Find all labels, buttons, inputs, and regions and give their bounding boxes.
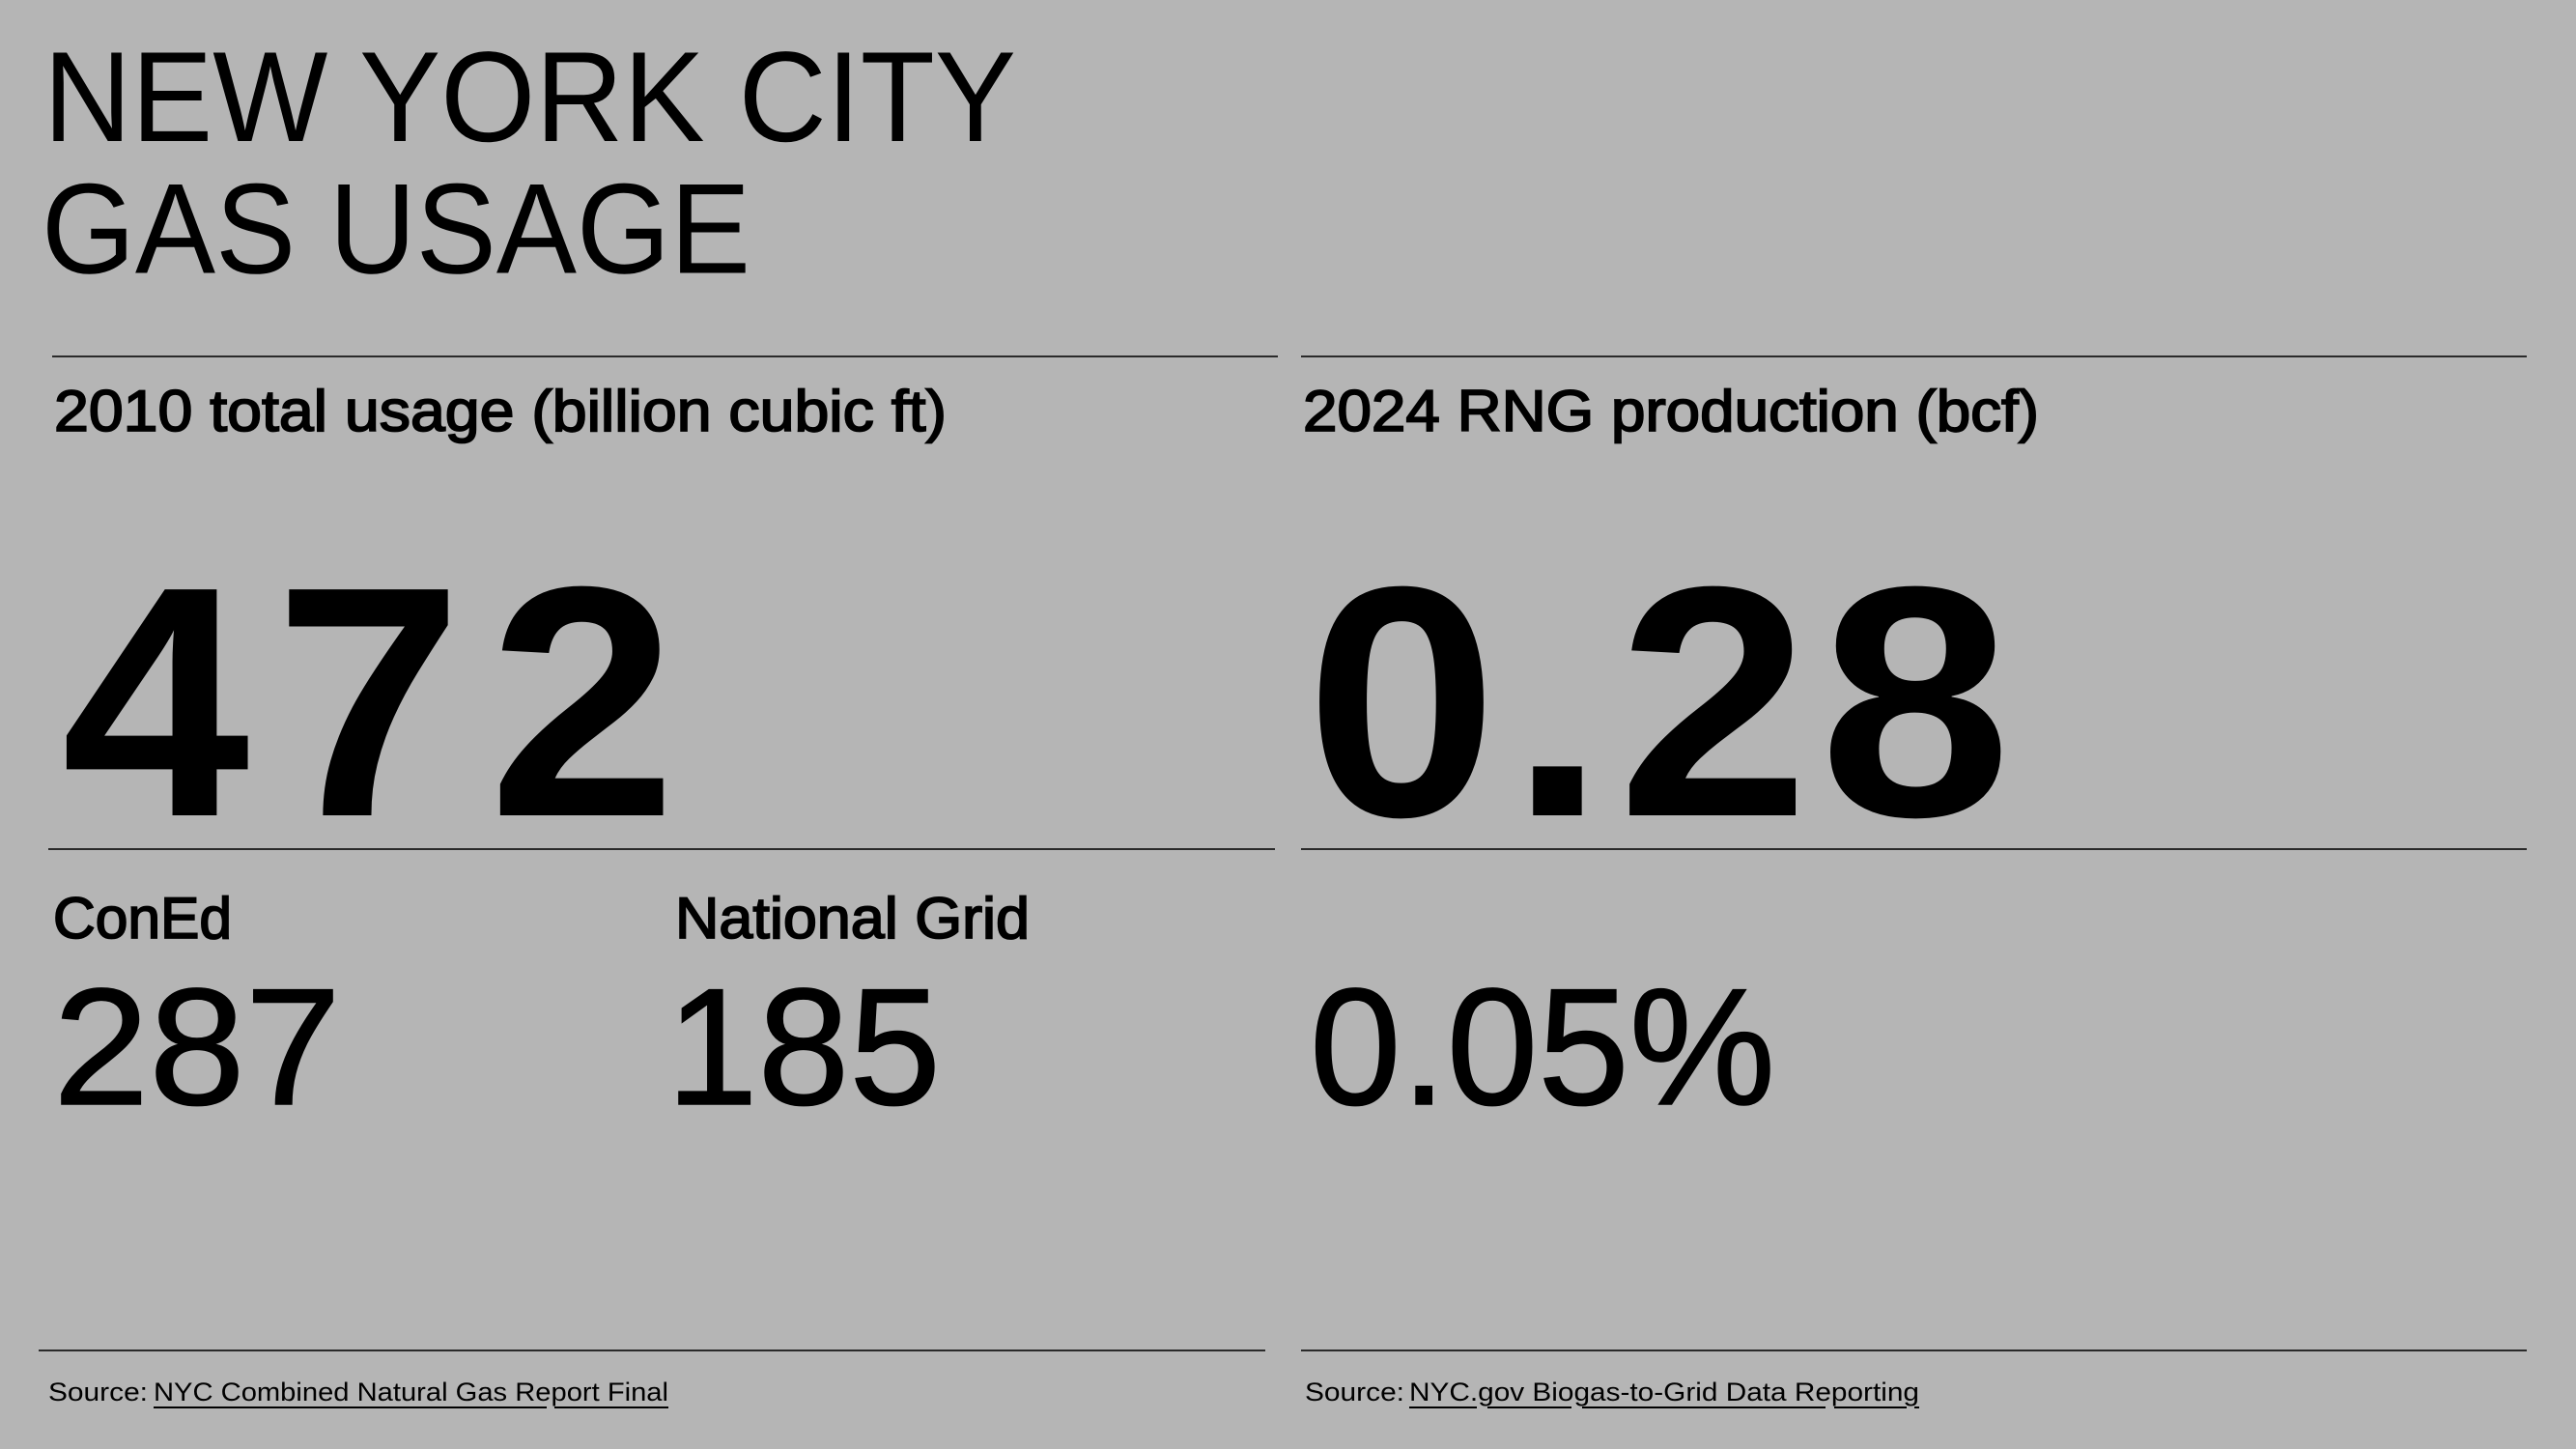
value: 287: 287 <box>53 954 341 1140</box>
big number: 472: 472 <box>62 520 676 886</box>
source: NYC Combined Natural Gas Report Final: NYC Combined Natural Gas Report Final <box>154 1378 668 1406</box>
source: NYC.gov Biogas-to-Grid Data Reporting: Source: <box>1305 1378 1404 1406</box>
heading: 2010 total usage: 2010 total usage (billion cubic ft) <box>54 379 947 443</box>
label: National Grid: National Grid <box>675 886 1030 951</box>
panel: 2010 total usage <box>53 379 1030 1140</box>
title <box>42 26 1016 301</box>
title: GAS USAGE <box>42 158 750 301</box>
value: 185: 185 <box>666 954 941 1140</box>
title: NEW YORK CITY <box>43 26 1016 169</box>
big number: 0.28: 0.28 <box>1306 518 2011 885</box>
panel: 2024 RNG production <box>1303 379 2039 1140</box>
source: NYC.gov Biogas-to-Grid Data Reporting: NYC.gov Biogas-to-Grid Data Reporting <box>1409 1378 1919 1406</box>
source: NYC Combined Natural Gas Report Final: Source: <box>48 1378 148 1406</box>
value: 0.05%: 0.05% <box>1310 954 1775 1140</box>
label: ConEd: ConEd <box>53 886 232 951</box>
heading: 2024 RNG production: 2024 RNG production (bcf) <box>1303 379 2039 443</box>
